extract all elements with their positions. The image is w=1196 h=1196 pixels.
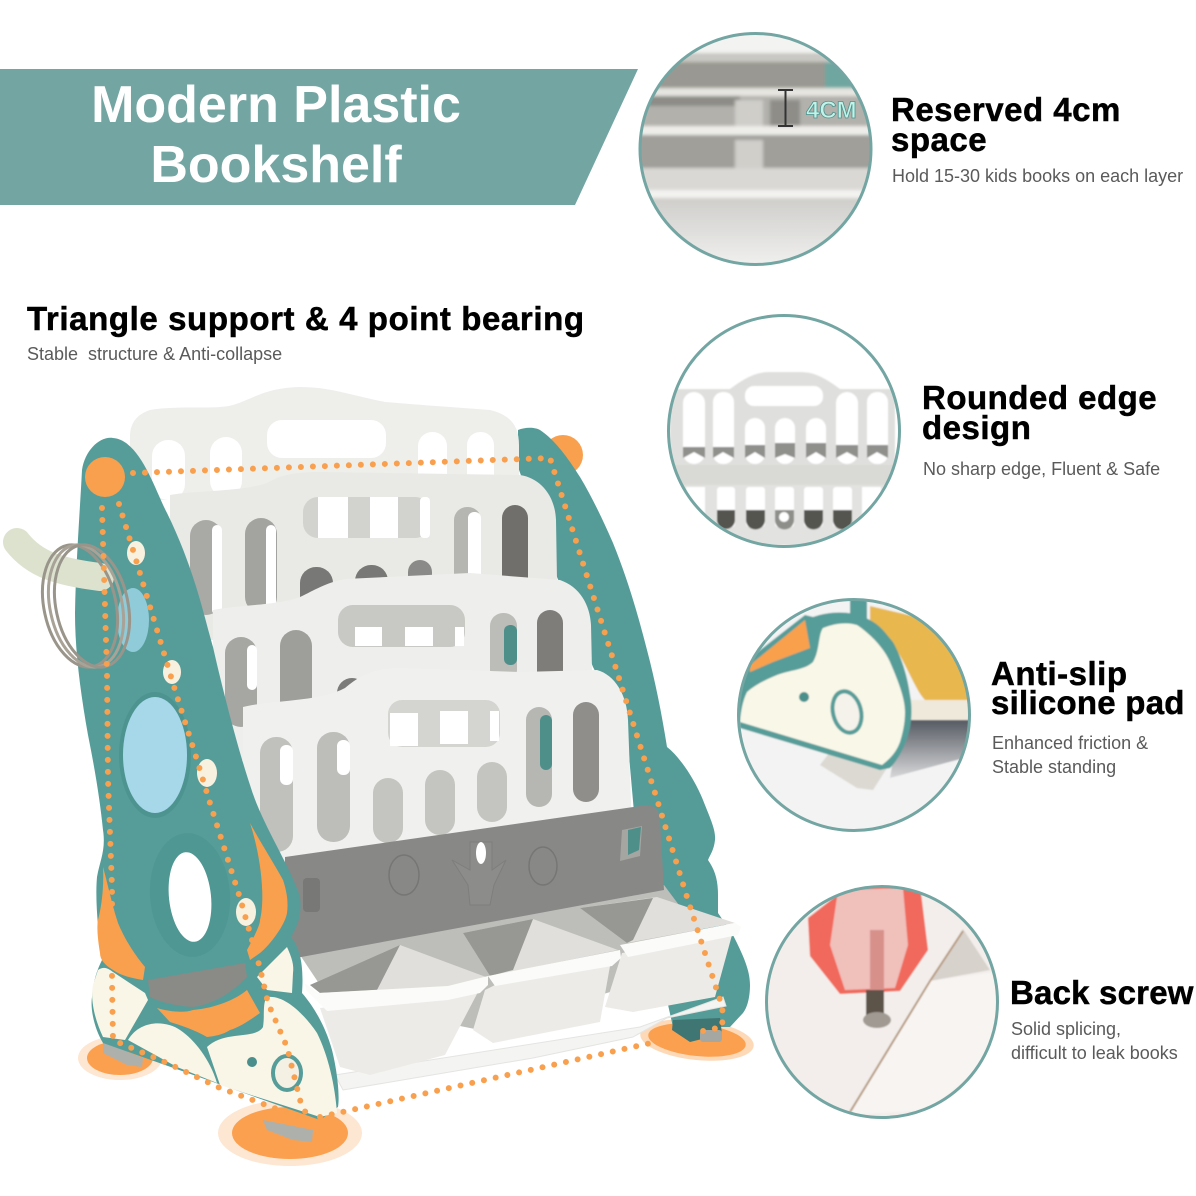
text: anti-slip: Enhanced friction & [992,733,1148,753]
base dial [273,1056,301,1090]
upper socket [117,588,149,652]
4cm bracket [778,90,793,126]
orange lower band [157,990,260,1037]
middle bin [463,919,621,1043]
rocket left side body [75,438,339,1120]
orange fin left [97,867,145,980]
right rocket side [518,428,750,1027]
illustration: rocket bookshelf [17,387,756,1166]
circle ring [738,600,970,830]
text: back screw: difficult to leak books [1011,1043,1178,1063]
window [119,692,191,818]
orange fin right [247,823,288,960]
title banner [0,69,638,205]
small dot [247,1057,257,1067]
callout: rounded edge [660,310,1160,550]
heading: triangle support: Stable structure & Anti-collapse [27,344,282,364]
circle ring [668,316,900,546]
text: reserved 4cm: Hold 15-30 kids books on each layer [892,166,1183,186]
orange nose [85,457,125,497]
text: rounded edge: No sharp edge, Fluent & Safe [923,459,1160,479]
callout: anti-slip pad [735,595,1185,835]
back panel [130,387,519,500]
grey front board [285,805,664,960]
text: back screw: Solid splicing, [1011,1019,1121,1039]
dotted triangle support lines [102,458,723,1120]
title banner: Bookshelf [150,136,402,194]
right orange nose [543,435,583,475]
left bin [305,945,488,1075]
grey band [148,963,247,1007]
photo circle: screw detail [768,888,996,1116]
floor pad glows [78,1014,756,1166]
cream foot panels [92,947,337,1117]
text: back screw: Back screw [1010,974,1194,1011]
feet [103,1042,313,1142]
photo circle: rounded shelf panel [670,372,896,545]
right foot [672,1018,722,1042]
text: rounded edge [922,379,1160,479]
base plate [335,997,726,1090]
lower hole [146,830,234,960]
shelf tier 3 [243,668,632,880]
title banner: Modern Plastic [91,76,461,134]
circle ring [766,886,998,1118]
screw caps [127,541,256,926]
text: anti-slip [991,655,1185,777]
heading: triangle support [27,300,585,364]
text: reserved 4cm: Reserved 4cm [891,91,1121,128]
photo circle: foot detail [735,595,975,835]
callout: 4cm space [630,25,1183,275]
text: reserved 4cm [891,91,1183,186]
photo circle: shelf gap [642,35,870,263]
storage bins [305,897,741,1075]
text: reserved 4cm: space [891,121,987,158]
heading: triangle support: Triangle support & 4 point bearing [27,300,585,337]
right bin [580,897,741,1012]
hook and rings [17,538,140,674]
text: rounded edge: design [922,409,1031,446]
circle ring [640,34,871,264]
text: anti-slip: Anti-slip [991,655,1127,692]
shelf tier 1 [170,472,558,640]
shadow behind bins [300,885,720,1030]
text: back screw [1010,974,1194,1063]
callout: back screw [760,880,1194,1125]
text: anti-slip: Stable standing [992,757,1116,777]
text: rounded edge: Rounded edge [922,379,1157,416]
text: anti-slip: silicone pad [991,684,1185,721]
shelf tier 2 [213,573,594,760]
4cm label: 4CM [806,97,857,124]
